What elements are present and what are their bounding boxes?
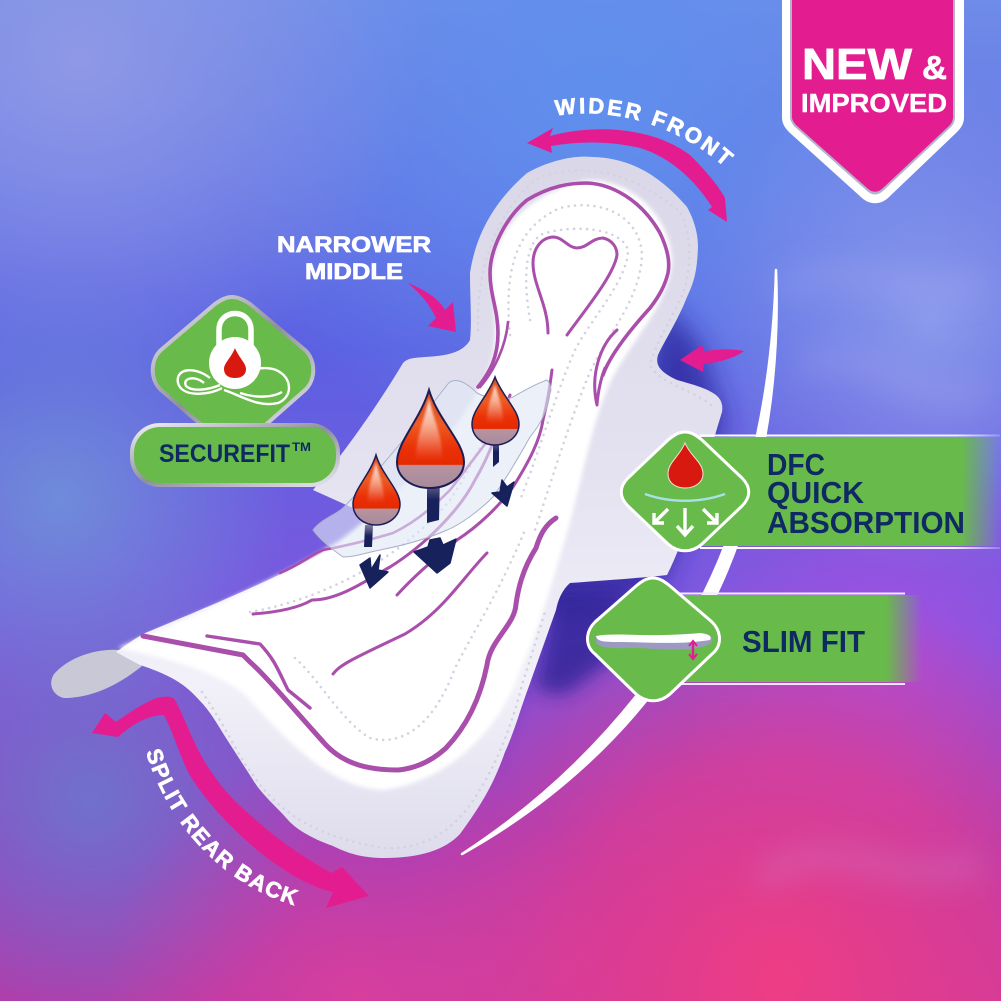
purple channel lines bbox=[143, 183, 669, 770]
badge: new and improved: IMPROVED bbox=[801, 88, 947, 118]
left stem and arrowhead bbox=[364, 525, 373, 547]
DFC label: QUICK bbox=[767, 475, 865, 510]
label: narrower middle: MIDDLE bbox=[305, 259, 403, 284]
diamond icon bbox=[621, 432, 749, 551]
pad shadow: lower wing bbox=[535, 590, 630, 695]
label: narrower middle bbox=[277, 232, 431, 284]
white absorbent core bbox=[118, 180, 672, 790]
DFC label: DFC bbox=[767, 447, 825, 482]
securefit label pill bbox=[132, 425, 338, 485]
embossed dot channels bbox=[202, 170, 714, 848]
flow drops and arrows bbox=[353, 377, 519, 588]
pad shadow bbox=[215, 300, 725, 810]
swoosh arc bbox=[462, 270, 777, 854]
securefit diamond icon bbox=[153, 297, 313, 428]
label: split rear back: SPLIT REAR BACK bbox=[147, 749, 300, 906]
DFC label: ABSORPTION bbox=[767, 505, 965, 540]
badge: new and improved: & bbox=[922, 49, 947, 86]
badge: new and improved: NEW bbox=[802, 40, 913, 89]
arrow: split rear back bbox=[92, 696, 369, 908]
DFC quick absorption feature bbox=[621, 432, 1000, 551]
arrow: narrower middle left bbox=[408, 283, 456, 332]
slim fit feature bbox=[588, 578, 922, 701]
green band bbox=[700, 437, 1000, 546]
diamond icon bbox=[588, 578, 720, 701]
arrow: wider front bbox=[527, 98, 735, 222]
securefit badge: SECUREFIT bbox=[159, 440, 290, 468]
drop middle bbox=[397, 390, 464, 488]
drop left bbox=[353, 455, 400, 525]
green band bbox=[680, 595, 922, 682]
drop right bbox=[472, 377, 519, 445]
pad side profile icon bbox=[596, 633, 712, 659]
pad outer shape bbox=[116, 157, 722, 858]
middle stem and arrowhead bbox=[427, 477, 440, 523]
arrow: narrower middle right bbox=[680, 345, 744, 372]
transparent film bbox=[313, 380, 551, 557]
padlock icon bbox=[178, 314, 289, 404]
sanitary pad bbox=[51, 157, 722, 858]
rear flap underside bbox=[51, 650, 142, 698]
label: wider front: WIDER FRONT bbox=[554, 98, 735, 164]
badge: new and improved bbox=[782, 0, 964, 203]
slim fit label: SLIM FIT bbox=[742, 624, 865, 659]
label: narrower middle: NARROWER bbox=[277, 232, 431, 257]
right stem and arrowhead bbox=[493, 437, 499, 467]
drop and arrows icon bbox=[645, 443, 725, 535]
securefit badge: TM bbox=[292, 440, 311, 454]
securefit badge bbox=[132, 297, 338, 485]
